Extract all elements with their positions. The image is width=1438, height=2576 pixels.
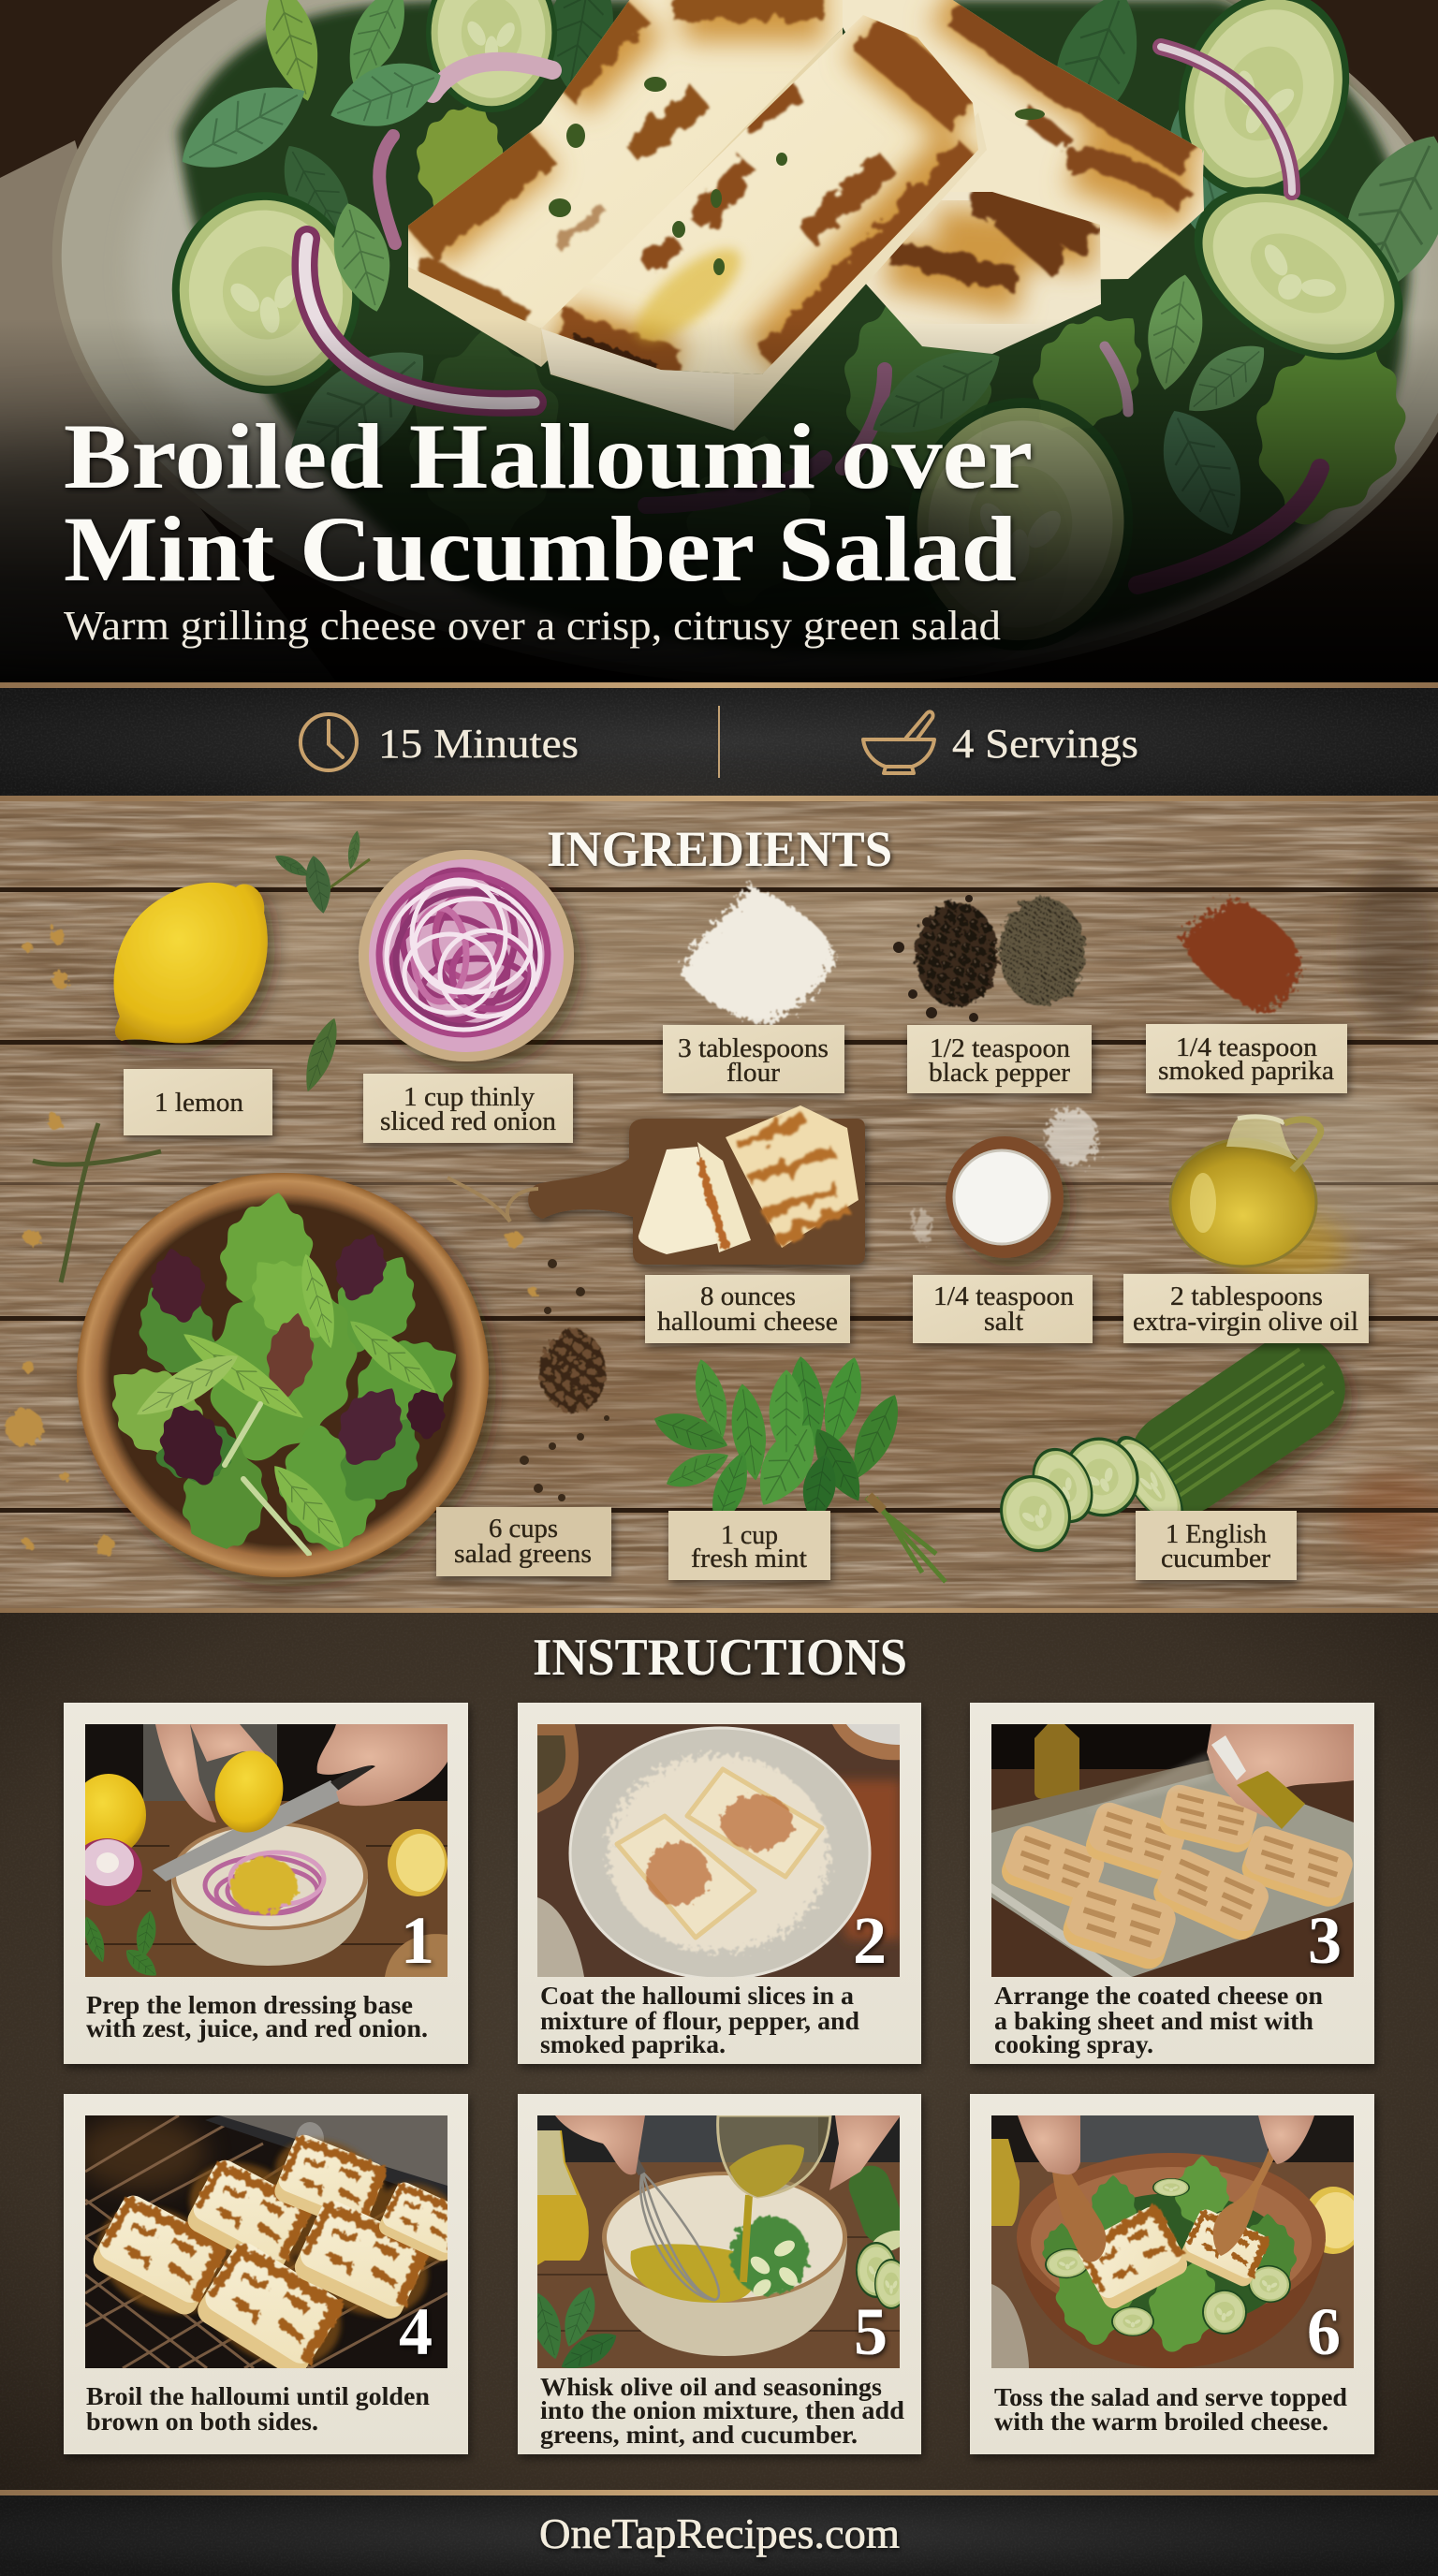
cucumber slices — [156, 0, 1434, 660]
label: fresh mint: 1 cup — [721, 1521, 778, 1550]
icon: red onion bowl — [359, 850, 574, 1061]
red onion rings — [305, 47, 1320, 585]
title: Broiled Halloumi over — [64, 404, 1033, 508]
step text 6: Toss the salad and serve topped — [994, 2383, 1347, 2411]
front slab — [541, 15, 987, 431]
step 6 photo: tossing salad — [991, 2115, 1363, 2368]
label: fresh mint: fresh mint — [691, 1544, 807, 1573]
step text 6: with the warm broiled cheese. — [994, 2408, 1328, 2436]
step text 3: Arrange the coated cheese on — [994, 1982, 1323, 2010]
step 2 photo: flour dredge — [537, 1724, 901, 1979]
step text 4: Broil the halloumi until golden — [86, 2382, 430, 2410]
icon: lemon — [114, 883, 268, 1043]
step text 4: brown on both sides. — [86, 2408, 318, 2436]
icon: flour pile — [682, 885, 836, 1025]
napkin — [0, 140, 283, 620]
step text 5: greens, mint, and cucumber. — [540, 2421, 858, 2449]
step card 1 — [64, 1703, 468, 2064]
left slab — [408, 0, 843, 367]
label: smoked paprika: smoked paprika — [1158, 1057, 1335, 1086]
step card 2 — [518, 1703, 921, 2064]
label: olive oil: 2 tablespoons — [1170, 1282, 1323, 1311]
label: fresh mint — [668, 1511, 830, 1580]
label: salt — [913, 1275, 1093, 1343]
step number 3: 3 — [1308, 1903, 1342, 1978]
back right slab — [824, 0, 1204, 281]
footer website: OneTapRecipes.com — [539, 2510, 900, 2557]
label: black pepper: 1/2 teaspoon — [930, 1034, 1070, 1063]
grilled halloumi slabs — [408, 0, 1204, 431]
herb flecks on cheese — [549, 77, 1045, 275]
icon: mint sprig — [271, 830, 370, 1095]
label: black pepper — [907, 1025, 1092, 1093]
step text 1: Prep the lemon dressing base — [86, 1991, 413, 2019]
label: halloumi: 8 ounces — [700, 1282, 796, 1311]
label: black pepper: black pepper — [929, 1059, 1071, 1088]
heading: INSTRUCTIONS — [533, 1629, 907, 1687]
step card 4 — [64, 2094, 477, 2454]
label: salt: 1/4 teaspoon — [933, 1282, 1074, 1311]
icon: black pepper — [893, 895, 1085, 1022]
label: flour: 3 tablespoons — [678, 1034, 829, 1063]
label: salt: salt — [984, 1308, 1023, 1337]
label: cucumber: 1 English — [1166, 1520, 1267, 1549]
step text 3: cooking spray. — [994, 2030, 1153, 2058]
label: olive oil — [1123, 1274, 1369, 1343]
step text 3: a baking sheet and mist with — [994, 2007, 1313, 2035]
label: smoked paprika — [1146, 1024, 1347, 1093]
icon: clock — [301, 714, 357, 770]
salt sprinkles — [913, 1109, 1098, 1243]
plate — [52, 0, 1438, 659]
step card 3 — [970, 1703, 1374, 2064]
step 5 photo: whisking dressing — [525, 2115, 912, 2378]
step text 2: Coat the halloumi slices in a — [540, 1982, 855, 2010]
label: salad greens: 6 cups — [489, 1515, 558, 1544]
label: cucumber — [1136, 1511, 1297, 1580]
step text 5 — [540, 2373, 904, 2449]
step card 6 — [970, 2094, 1374, 2454]
panel: instructions — [0, 1608, 1438, 2494]
icon: english cucumber — [988, 1316, 1364, 1564]
crumbs and thyme sprig — [6, 929, 538, 1557]
step number 4: 4 — [399, 2294, 433, 2369]
time label: 15 Minutes — [378, 721, 579, 767]
stats band — [0, 682, 1438, 802]
step text 2: smoked paprika. — [540, 2030, 726, 2058]
icon: bowl with pestle — [863, 711, 934, 773]
mint leaves — [167, 0, 1279, 549]
label: red onion: 1 cup thinly — [404, 1083, 535, 1112]
label: halloumi — [645, 1275, 850, 1343]
step number 1: 1 — [401, 1903, 434, 1978]
step text 2 — [540, 1982, 859, 2058]
subtitle: Warm grilling cheese over a crisp, citrusy green salad — [64, 603, 1001, 649]
label: salad greens: salad greens — [454, 1540, 592, 1569]
icon: olive oil jug — [1170, 1117, 1345, 1287]
ingredient labels — [124, 1024, 1369, 1580]
title: Mint Cucumber Salad — [64, 497, 1017, 601]
icon: salt bowl — [946, 1136, 1064, 1258]
icon: mint bunch — [649, 1354, 946, 1582]
step number 2: 2 — [853, 1903, 887, 1978]
label: halloumi: halloumi cheese — [657, 1308, 838, 1337]
scattered spices — [520, 1259, 609, 1501]
step text 6 — [994, 2383, 1347, 2436]
servings label: 4 Servings — [952, 721, 1138, 767]
label: red onion: sliced red onion — [380, 1107, 556, 1136]
divider — [718, 706, 720, 778]
icon: halloumi on cutting board — [448, 1105, 865, 1265]
title — [64, 404, 1033, 601]
step text 5: into the onion mixture, then add — [540, 2396, 904, 2424]
label: lemon: 1 lemon — [154, 1089, 243, 1118]
label: salad greens — [436, 1507, 611, 1576]
icon: smoked paprika — [1181, 897, 1301, 1013]
label: flour — [663, 1025, 844, 1093]
step number 5: 5 — [854, 2294, 888, 2369]
small front right slab — [863, 192, 1101, 354]
label: olive oil: extra-virgin olive oil — [1133, 1308, 1358, 1337]
left text vignette — [0, 431, 1002, 674]
step number 6: 6 — [1307, 2294, 1341, 2369]
heading: INGREDIENTS — [547, 821, 892, 877]
step text 1 — [86, 1991, 428, 2042]
step text 4 — [86, 2382, 430, 2436]
panel: ingredients — [0, 801, 1438, 1608]
icon: salad bowl — [77, 1173, 489, 1577]
label: red onion — [363, 1074, 573, 1143]
step text 5: Whisk olive oil and seasonings — [540, 2373, 882, 2401]
step card 5 — [518, 2094, 921, 2454]
label: flour: flour — [726, 1059, 781, 1088]
step text 3 — [994, 1982, 1323, 2058]
bottom vignette — [0, 318, 1438, 683]
hero panel: grilled halloumi salad photo — [0, 0, 1438, 722]
step text 2: mixture of flour, pepper, and — [540, 2007, 859, 2035]
step text 1: with zest, juice, and red onion. — [86, 2014, 428, 2042]
step 1 photo: zesting lemon — [71, 1724, 448, 1983]
footer band — [0, 2490, 1438, 2576]
step 4 photo: oven broiling — [76, 2115, 477, 2389]
label: cucumber: cucumber — [1161, 1544, 1271, 1573]
step 3 photo: baking sheet — [991, 1724, 1357, 1977]
label: smoked paprika: 1/4 teaspoon — [1176, 1033, 1317, 1062]
label: lemon — [124, 1069, 272, 1135]
icon: peppercorn pile — [539, 1330, 607, 1412]
salad greens base — [178, 0, 1438, 655]
